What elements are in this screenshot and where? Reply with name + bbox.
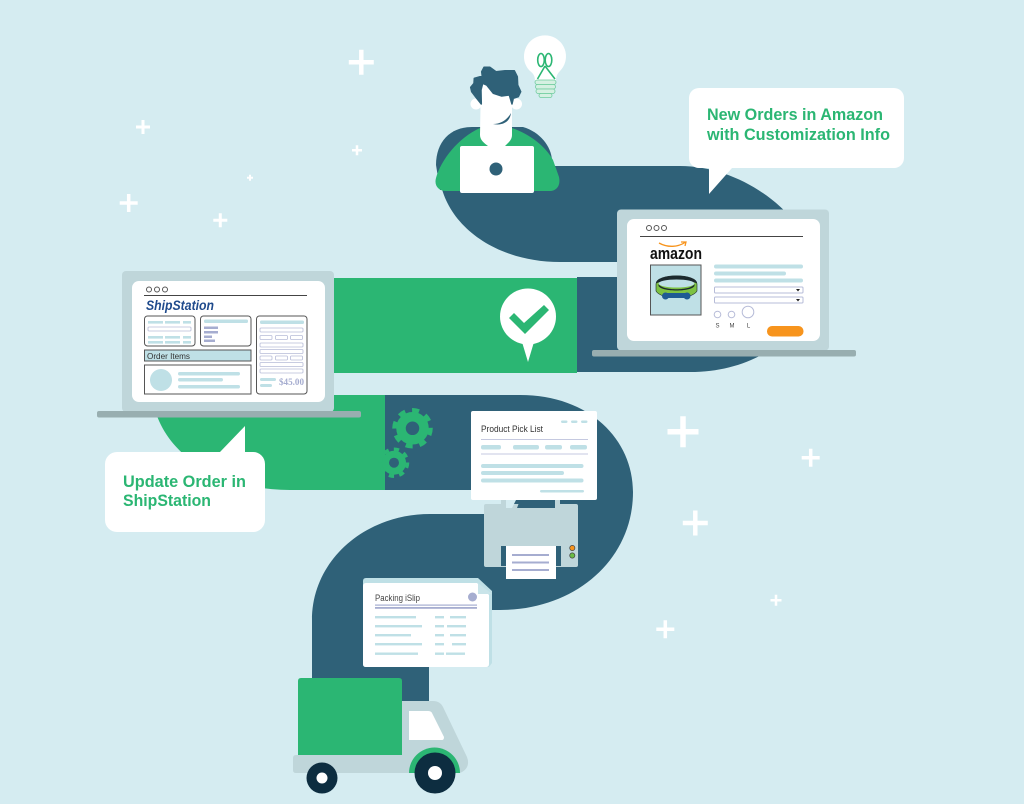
callout: update order in ShipStation (105, 426, 265, 532)
orange button (767, 326, 804, 336)
laptop logo (490, 162, 502, 176)
status lights (570, 545, 575, 558)
callout: update order in ShipStation: ShipStation (123, 491, 211, 510)
ShipStation logo: ShipStation (146, 297, 214, 313)
document: packing slip: Packing iSlip (375, 593, 420, 603)
icon: light bulb (524, 35, 566, 98)
callout: new orders in Amazon: with Customization Info (706, 125, 890, 144)
cargo box (298, 678, 402, 755)
icon: gears (380, 410, 430, 476)
Amazon logo: amazon (650, 244, 702, 263)
head and neck (480, 80, 512, 146)
cab and chassis (293, 701, 468, 773)
front wheel (414, 752, 456, 794)
description lines (714, 264, 803, 282)
order items bar: Order Items (147, 351, 190, 361)
road: upper dark section (440, 166, 815, 372)
laptop: Amazon order page (592, 210, 856, 356)
size selector: L (747, 324, 751, 330)
rear wheel (306, 762, 338, 794)
order items bar (144, 350, 251, 361)
size selector: S (715, 324, 720, 330)
callout: update order in ShipStation: Update Order in (123, 472, 246, 491)
wheel arch (409, 748, 460, 773)
person at laptop (435, 67, 559, 193)
printer (484, 498, 578, 579)
document: product pick list: Product Pick List (481, 424, 543, 434)
size selector: M (730, 324, 734, 330)
road: lower dark section (312, 395, 633, 705)
totals panel: $45.00 (279, 377, 305, 387)
order item row (144, 365, 251, 394)
chair back (436, 127, 552, 190)
road: green section (155, 278, 577, 490)
gap between road bands (334, 373, 634, 395)
hair (471, 67, 521, 104)
callout: new orders in Amazon (689, 88, 904, 194)
green torso (435, 128, 559, 191)
delivery truck (293, 678, 468, 794)
mouth (493, 113, 511, 124)
size selector (714, 306, 754, 330)
shipping panel (200, 316, 251, 346)
totals panel (256, 316, 307, 394)
product image: dog collar (650, 265, 701, 315)
customer panel (144, 316, 195, 346)
window dots (646, 226, 666, 230)
printed sheet (506, 546, 556, 579)
window dots (146, 287, 168, 292)
icon: checkmark pin (500, 288, 556, 362)
dropdowns (714, 287, 803, 303)
laptop: ShipStation order page (97, 271, 361, 418)
callout: new orders in Amazon: New Orders in Amazon (707, 105, 883, 124)
sparkle plus signs (120, 50, 820, 638)
document: product pick list (471, 411, 597, 500)
document: packing slip (363, 578, 492, 667)
laptop (460, 146, 534, 193)
cab window (409, 711, 444, 740)
ears (470, 98, 522, 110)
